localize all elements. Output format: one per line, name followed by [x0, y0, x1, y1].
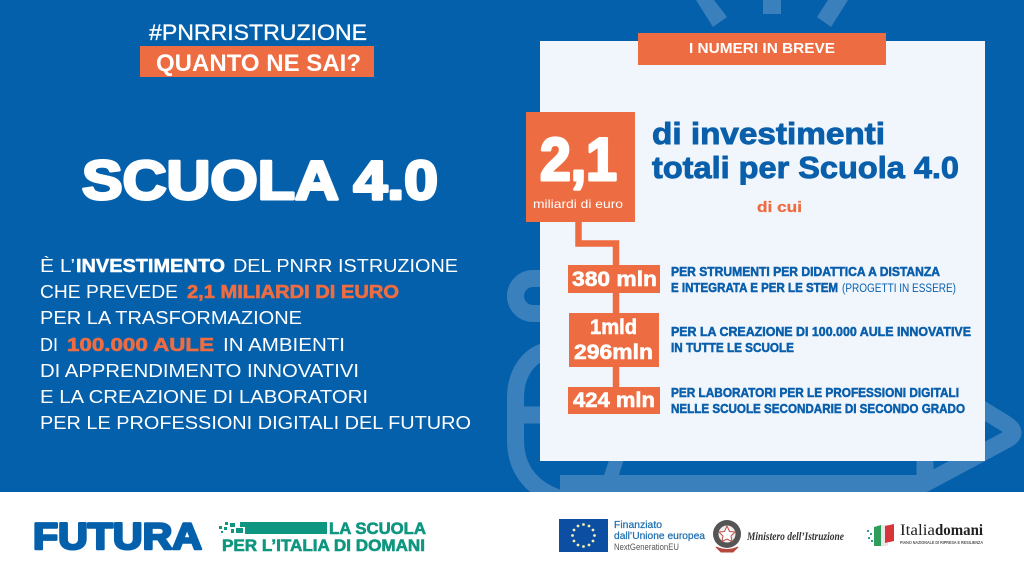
description text block: IN AMBIENTI: [223, 335, 345, 355]
text: funded by the European Union: Finanziato: [614, 519, 662, 531]
logo text: Italia domani: PIANO NAZIONALE DI RIPRESA E RESILIENZA: [900, 540, 984, 545]
big number box: 2,1: [540, 126, 617, 193]
text: funded by the European Union: dall’Unione europea: [614, 530, 705, 542]
logo: la scuola per l'Italia di domani: PER L’ITALIA DI DOMANI: [222, 537, 425, 555]
logo text: Italia domani: [900, 522, 984, 545]
big number box: miliardi di euro: [533, 197, 623, 211]
item: 1 mld 296 mln: PER LA CREAZIONE DI 100.000 AULE INNOVATIVE: [671, 325, 971, 339]
header: i numeri in breve: I NUMERI IN BREVE: [689, 40, 835, 57]
logo: la scuola per l'Italia di domani: LA SCUOLA: [329, 520, 426, 538]
logo text: Italia domani: domani: [935, 522, 984, 539]
text: funded by the European Union: [614, 519, 705, 552]
connector lines: [578, 222, 616, 387]
description text block: CHE PREVEDE: [40, 282, 178, 302]
orange label: quanto ne sai: QUANTO NE SAI?: [156, 50, 361, 77]
text: funded by the European Union: NextGenerationEU: [614, 542, 679, 552]
description text block: DI: [40, 335, 58, 355]
item: 424 mln: NELLE SCUOLE SECONDARIE DI SECONDO GRADO: [671, 402, 965, 416]
big number box: [526, 112, 635, 222]
description text block: PER LE PROFESSIONI DIGITALI DEL FUTURO: [40, 413, 471, 433]
description text block: [40, 256, 471, 433]
logo: Italian Republic emblem: [713, 520, 741, 552]
logo: EU flag: [559, 519, 608, 552]
title: SCUOLA 4.0: [82, 149, 438, 211]
header: i numeri in breve: [638, 33, 886, 65]
item: 424 mln: PER LABORATORI PER LE PROFESSIONI DIGITALI: [671, 386, 959, 400]
logo: Futura: FUTURA: [33, 516, 202, 557]
background pattern: outlined school icon: [516, 0, 1013, 500]
item: 424 mln: [568, 386, 965, 416]
white footer band: [0, 492, 1024, 569]
description text block: DI APPRENDIMENTO INNOVATIVI: [40, 361, 359, 381]
logo: la scuola per l'Italia di domani: [219, 520, 426, 555]
item: 1 mld 296 mln: 296mln: [574, 341, 653, 364]
description text block: DEL PNRR ISTRUZIONE: [233, 256, 458, 276]
description text block: È L’: [40, 256, 75, 276]
item: 380 mln: 380 mln: [572, 268, 657, 291]
item: 1 mld 296 mln: [569, 313, 971, 367]
description text block: INVESTIMENTO: [76, 256, 225, 276]
panel: numbers card: [526, 33, 985, 461]
item: 424 mln: 424 mln: [573, 389, 655, 412]
description text block: E LA CREAZIONE DI LABORATORI: [40, 387, 368, 407]
hashtag heading: #PNRRISTRUZIONE: [149, 20, 367, 45]
headline: total investment: [652, 116, 959, 185]
item: 380 mln: PER STRUMENTI PER DIDATTICA A DISTANZA: [671, 265, 940, 279]
logo: Italia domani flag icon: [867, 524, 894, 546]
headline: total investment: di investimenti: [652, 116, 885, 151]
description text block: 2,1 MILIARDI DI EURO: [187, 282, 399, 302]
item: 380 mln: [568, 265, 956, 295]
description text block: PER LA TRASFORMAZIONE: [40, 308, 302, 328]
text: Ministero dell'Istruzione: Ministero dell’Istruzione: [746, 529, 845, 543]
item: 380 mln: (PROGETTI IN ESSERE): [842, 283, 956, 295]
logo text: Italia domani: Italia: [900, 522, 935, 539]
headline: total investment: totali per Scuola 4.0: [652, 150, 959, 185]
item: 1 mld 296 mln: 1mld: [590, 316, 637, 339]
item: 1 mld 296 mln: IN TUTTE LE SCUOLE: [671, 341, 794, 355]
di cui label: di cui: [757, 199, 802, 216]
description text block: 100.000 AULE: [67, 335, 214, 355]
item: 380 mln: E INTEGRATA E PER LE STEM: [671, 281, 838, 295]
